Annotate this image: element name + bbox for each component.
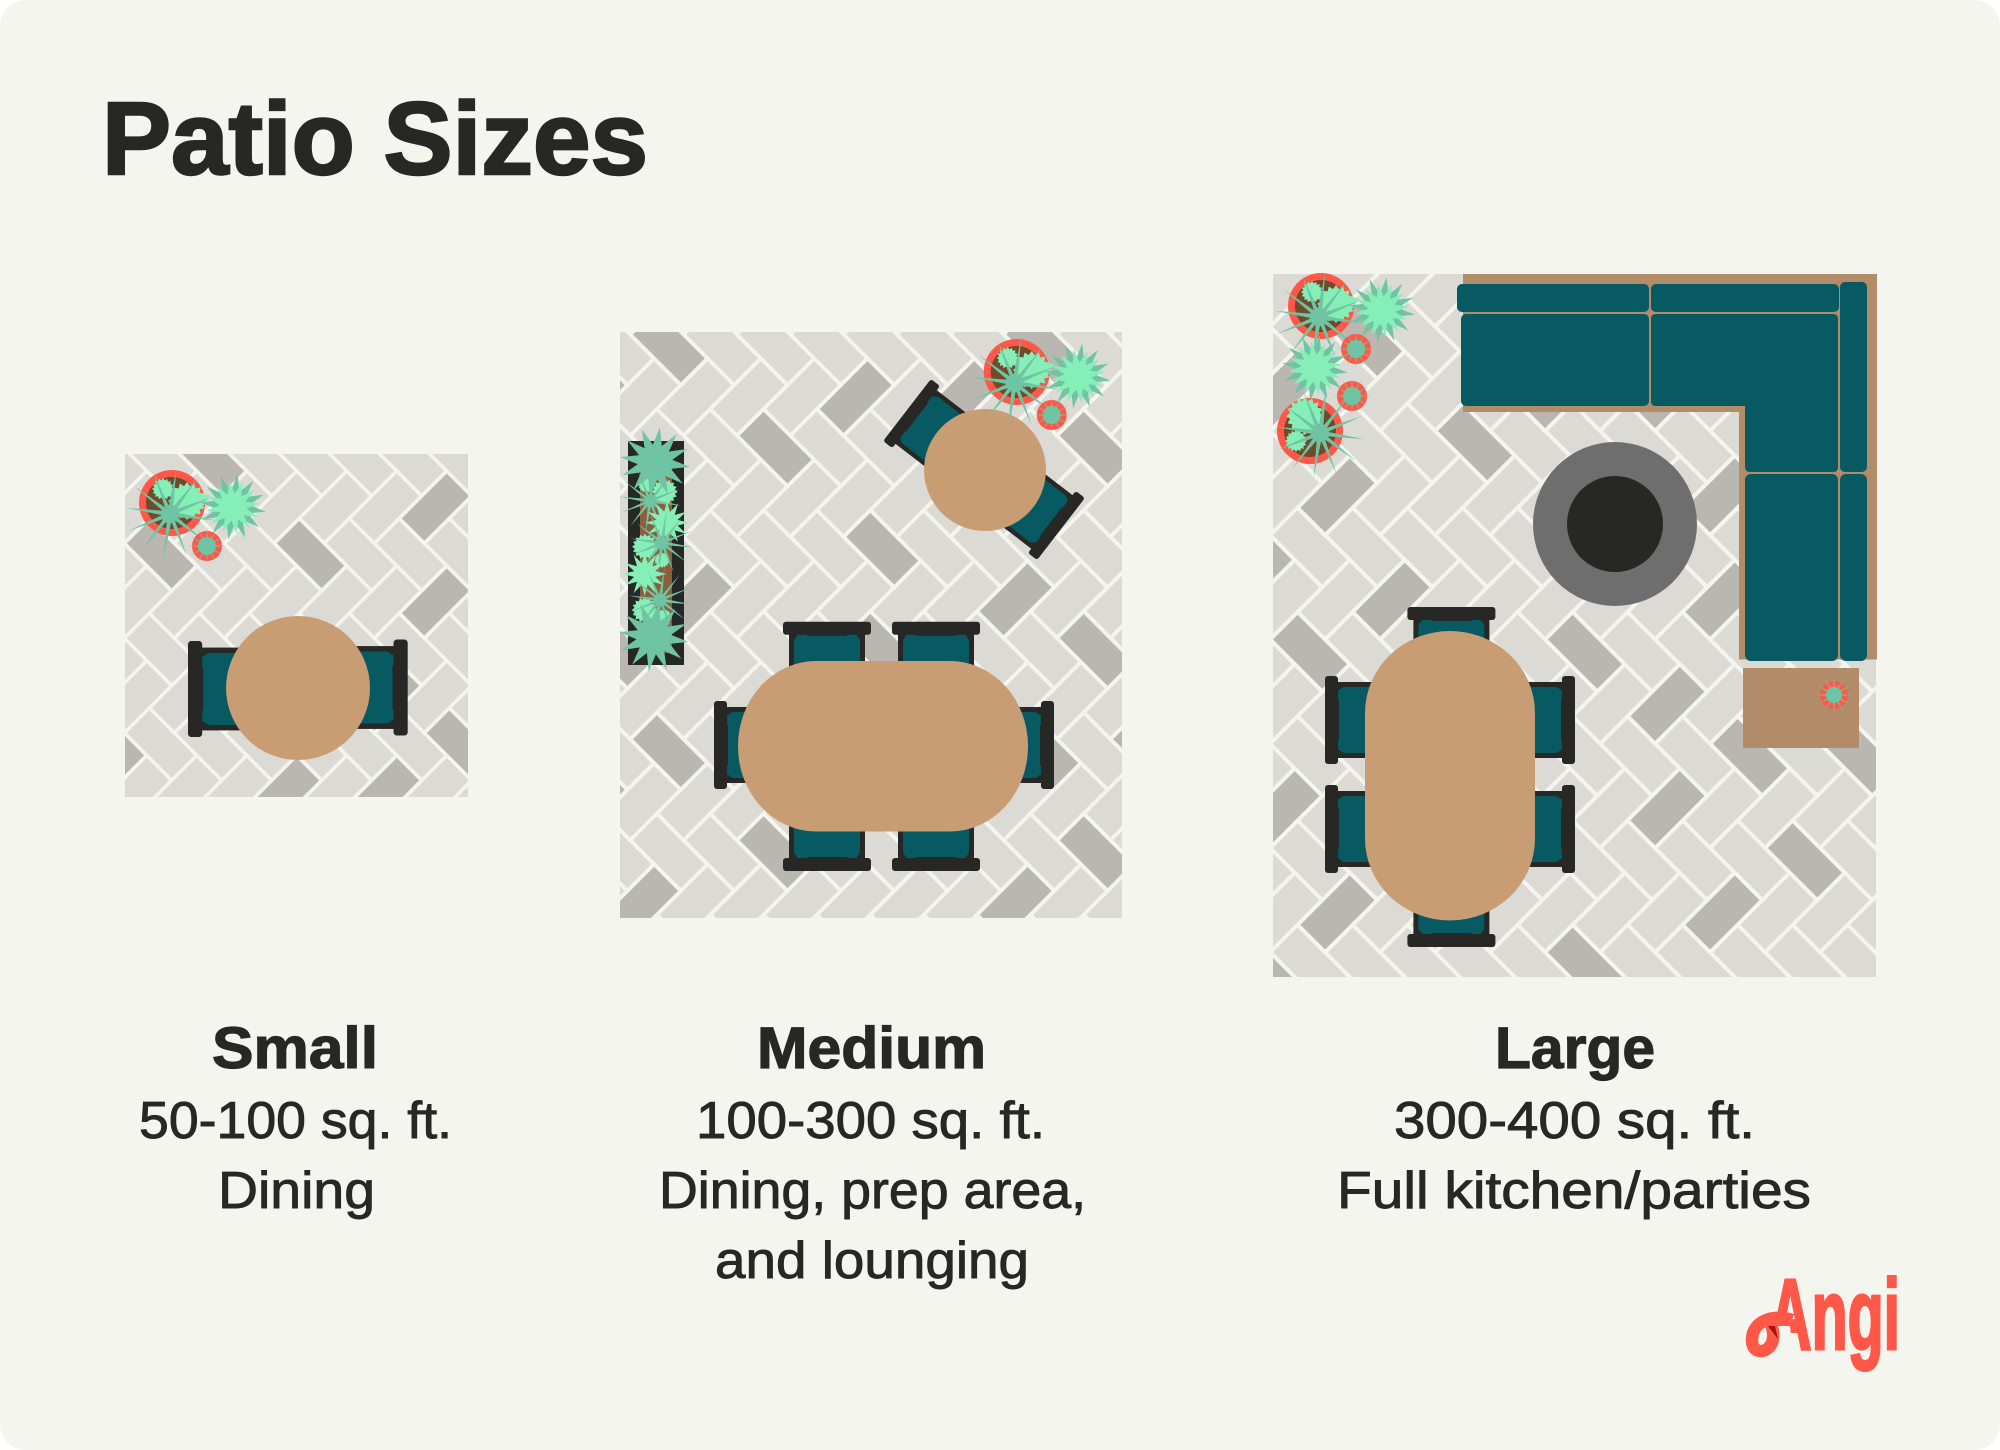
labels: medium: 100-300 sq. ft. xyxy=(696,1092,1045,1150)
chair: small left xyxy=(188,641,269,737)
table: small round xyxy=(226,616,370,760)
paving: large xyxy=(1273,274,1876,977)
paving: medium xyxy=(620,332,1122,918)
fire pit xyxy=(1533,442,1697,606)
labels: small: 50-100 sq. ft. xyxy=(139,1092,452,1150)
labels: large: Large xyxy=(1495,1016,1655,1081)
logo: Angi: Angi xyxy=(1769,1259,1900,1371)
labels: large: Full kitchen/parties xyxy=(1337,1162,1811,1220)
logo: Angi xyxy=(1752,1259,1900,1371)
dining set: medium xyxy=(714,622,1054,871)
chair: small right xyxy=(327,640,408,735)
plants: small xyxy=(119,463,270,565)
dining set: large xyxy=(1325,607,1575,947)
labels: small: Dining xyxy=(218,1162,375,1220)
panel: medium patio xyxy=(618,332,1122,918)
labels: small: Small xyxy=(212,1016,378,1081)
labels: medium xyxy=(659,1016,1086,1290)
labels: small xyxy=(139,1016,452,1220)
labels: large: 300-400 sq. ft. xyxy=(1394,1092,1755,1150)
panel: small patio xyxy=(125,454,468,797)
plants: medium xyxy=(964,332,1115,434)
labels: medium: Medium xyxy=(757,1016,986,1081)
paving: small xyxy=(125,454,468,797)
plants: large xyxy=(1268,266,1419,484)
sectional sofa xyxy=(1457,274,1877,661)
labels: large xyxy=(1337,1016,1811,1220)
lounge set: medium xyxy=(883,379,1085,560)
labels: medium: Dining, prep area, xyxy=(659,1162,1086,1220)
planter box xyxy=(614,422,698,677)
title: Patio Sizes xyxy=(102,81,648,196)
labels: medium: and lounging xyxy=(715,1232,1029,1290)
side table with plant xyxy=(1743,668,1859,748)
panel: large patio xyxy=(1273,272,1877,977)
